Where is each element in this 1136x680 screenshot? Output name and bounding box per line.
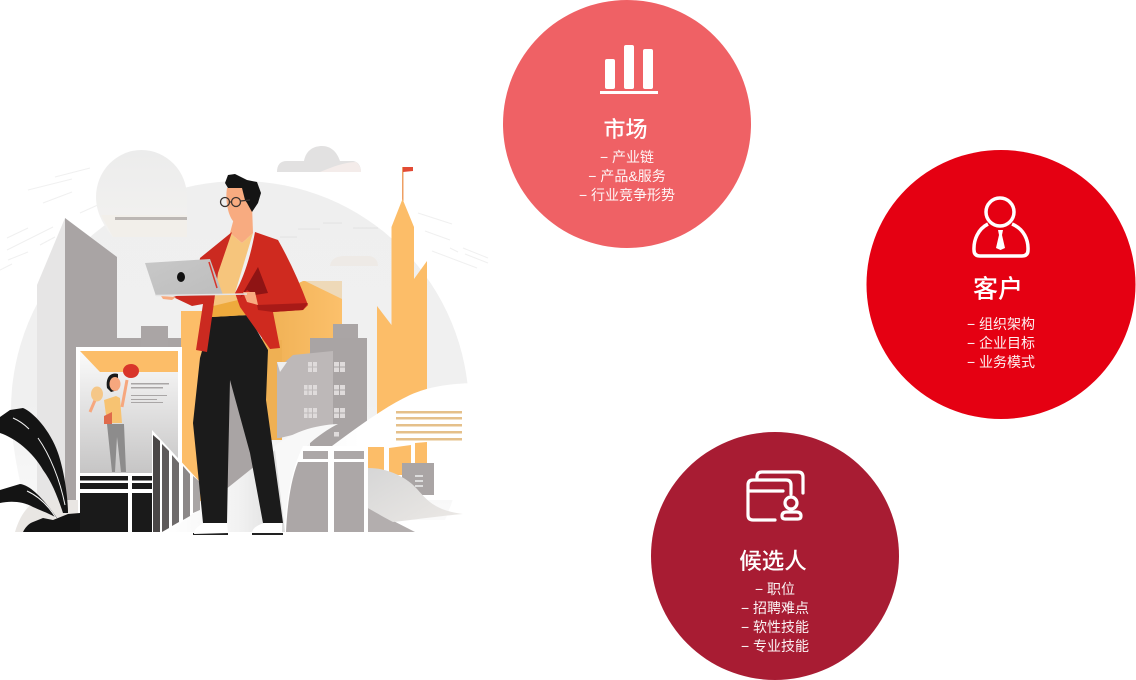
- panel: candidate circle: [651, 432, 899, 680]
- windows: [304, 362, 345, 436]
- poster black bars: [80, 476, 152, 532]
- white sail: [270, 424, 338, 532]
- icon: id card with person: [748, 472, 803, 520]
- tall gray building: [37, 218, 187, 500]
- heading: 候选人: [739, 549, 807, 574]
- hands: [161, 292, 258, 305]
- jacket left side: [173, 232, 232, 352]
- panel: market circle: [503, 0, 751, 248]
- grid building: [285, 446, 368, 532]
- cloud: [277, 146, 361, 172]
- list: − 软性技能: [741, 619, 809, 635]
- list: [579, 149, 675, 203]
- list: − 企业目标: [967, 335, 1035, 351]
- flag tower: [377, 167, 427, 468]
- billboard poster: [76, 347, 182, 533]
- jacket right side: [235, 232, 308, 349]
- white ground wave: [167, 450, 285, 532]
- trousers: [193, 315, 283, 523]
- icon: bar chart: [600, 45, 658, 94]
- heading: 客户: [973, 276, 1023, 304]
- man: [145, 174, 308, 535]
- illustration: man with laptop in a city: [0, 146, 488, 540]
- poster text: [131, 383, 169, 403]
- front white wave: [285, 383, 472, 500]
- list: − 组织架构: [967, 316, 1035, 332]
- sky dashes: [280, 223, 378, 237]
- panel: customer circle: [866, 150, 1136, 419]
- plant: [0, 408, 80, 532]
- orange buildings: [181, 281, 342, 501]
- glasses: [220, 198, 250, 206]
- small orange blocks: [368, 442, 427, 475]
- list: [967, 316, 1035, 370]
- stair stripes: [152, 430, 200, 532]
- heading: 市场: [603, 117, 648, 142]
- sun dome: [96, 150, 187, 237]
- list: [741, 581, 809, 654]
- orange text lines: [396, 411, 462, 440]
- speed lines: [0, 168, 488, 270]
- list: − 招聘难点: [741, 600, 809, 616]
- list: − 职位: [755, 581, 795, 597]
- list: − 业务模式: [967, 354, 1035, 370]
- hair: [225, 174, 261, 212]
- gray flowing wave: [368, 468, 463, 532]
- ground shadow: [15, 500, 78, 532]
- list: − 产品&服务: [588, 168, 666, 184]
- icon: person with tie: [974, 198, 1028, 256]
- list: − 专业技能: [741, 638, 809, 654]
- list: − 产业链: [600, 149, 654, 165]
- background circle: [11, 181, 469, 520]
- shoes: [193, 523, 283, 535]
- shirt: [212, 233, 253, 317]
- gray high-rises: [277, 324, 367, 468]
- neck and face: [226, 187, 253, 243]
- faint cloud: [330, 256, 378, 266]
- ground fade: [0, 532, 480, 540]
- list: − 行业竞争形势: [579, 187, 675, 203]
- gray between the legs: [222, 365, 262, 490]
- small gray building: [402, 463, 434, 495]
- poster figure: [90, 364, 139, 472]
- laptop: [145, 259, 247, 296]
